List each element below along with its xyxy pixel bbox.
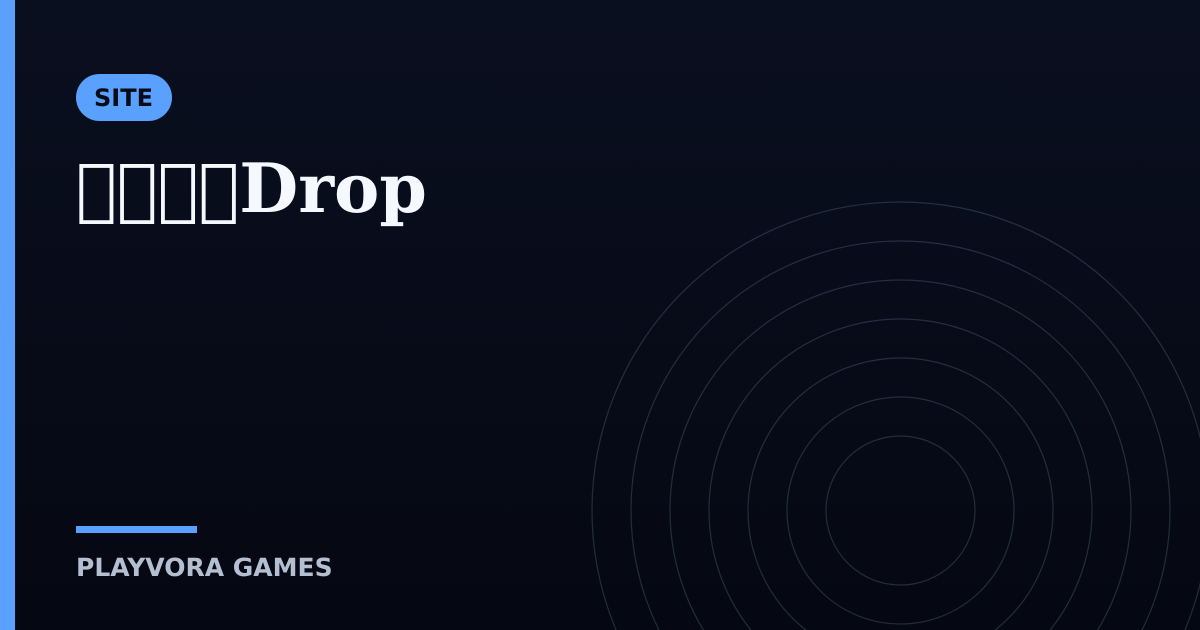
brand name: PLAYVORA GAMES [76,553,333,582]
badge: SITE [76,74,172,121]
badge: SITE: SITE [94,84,153,112]
title: Drop [76,149,427,229]
left accent bar [0,0,15,630]
concentric rings [592,202,1200,630]
footer accent line [76,526,197,533]
